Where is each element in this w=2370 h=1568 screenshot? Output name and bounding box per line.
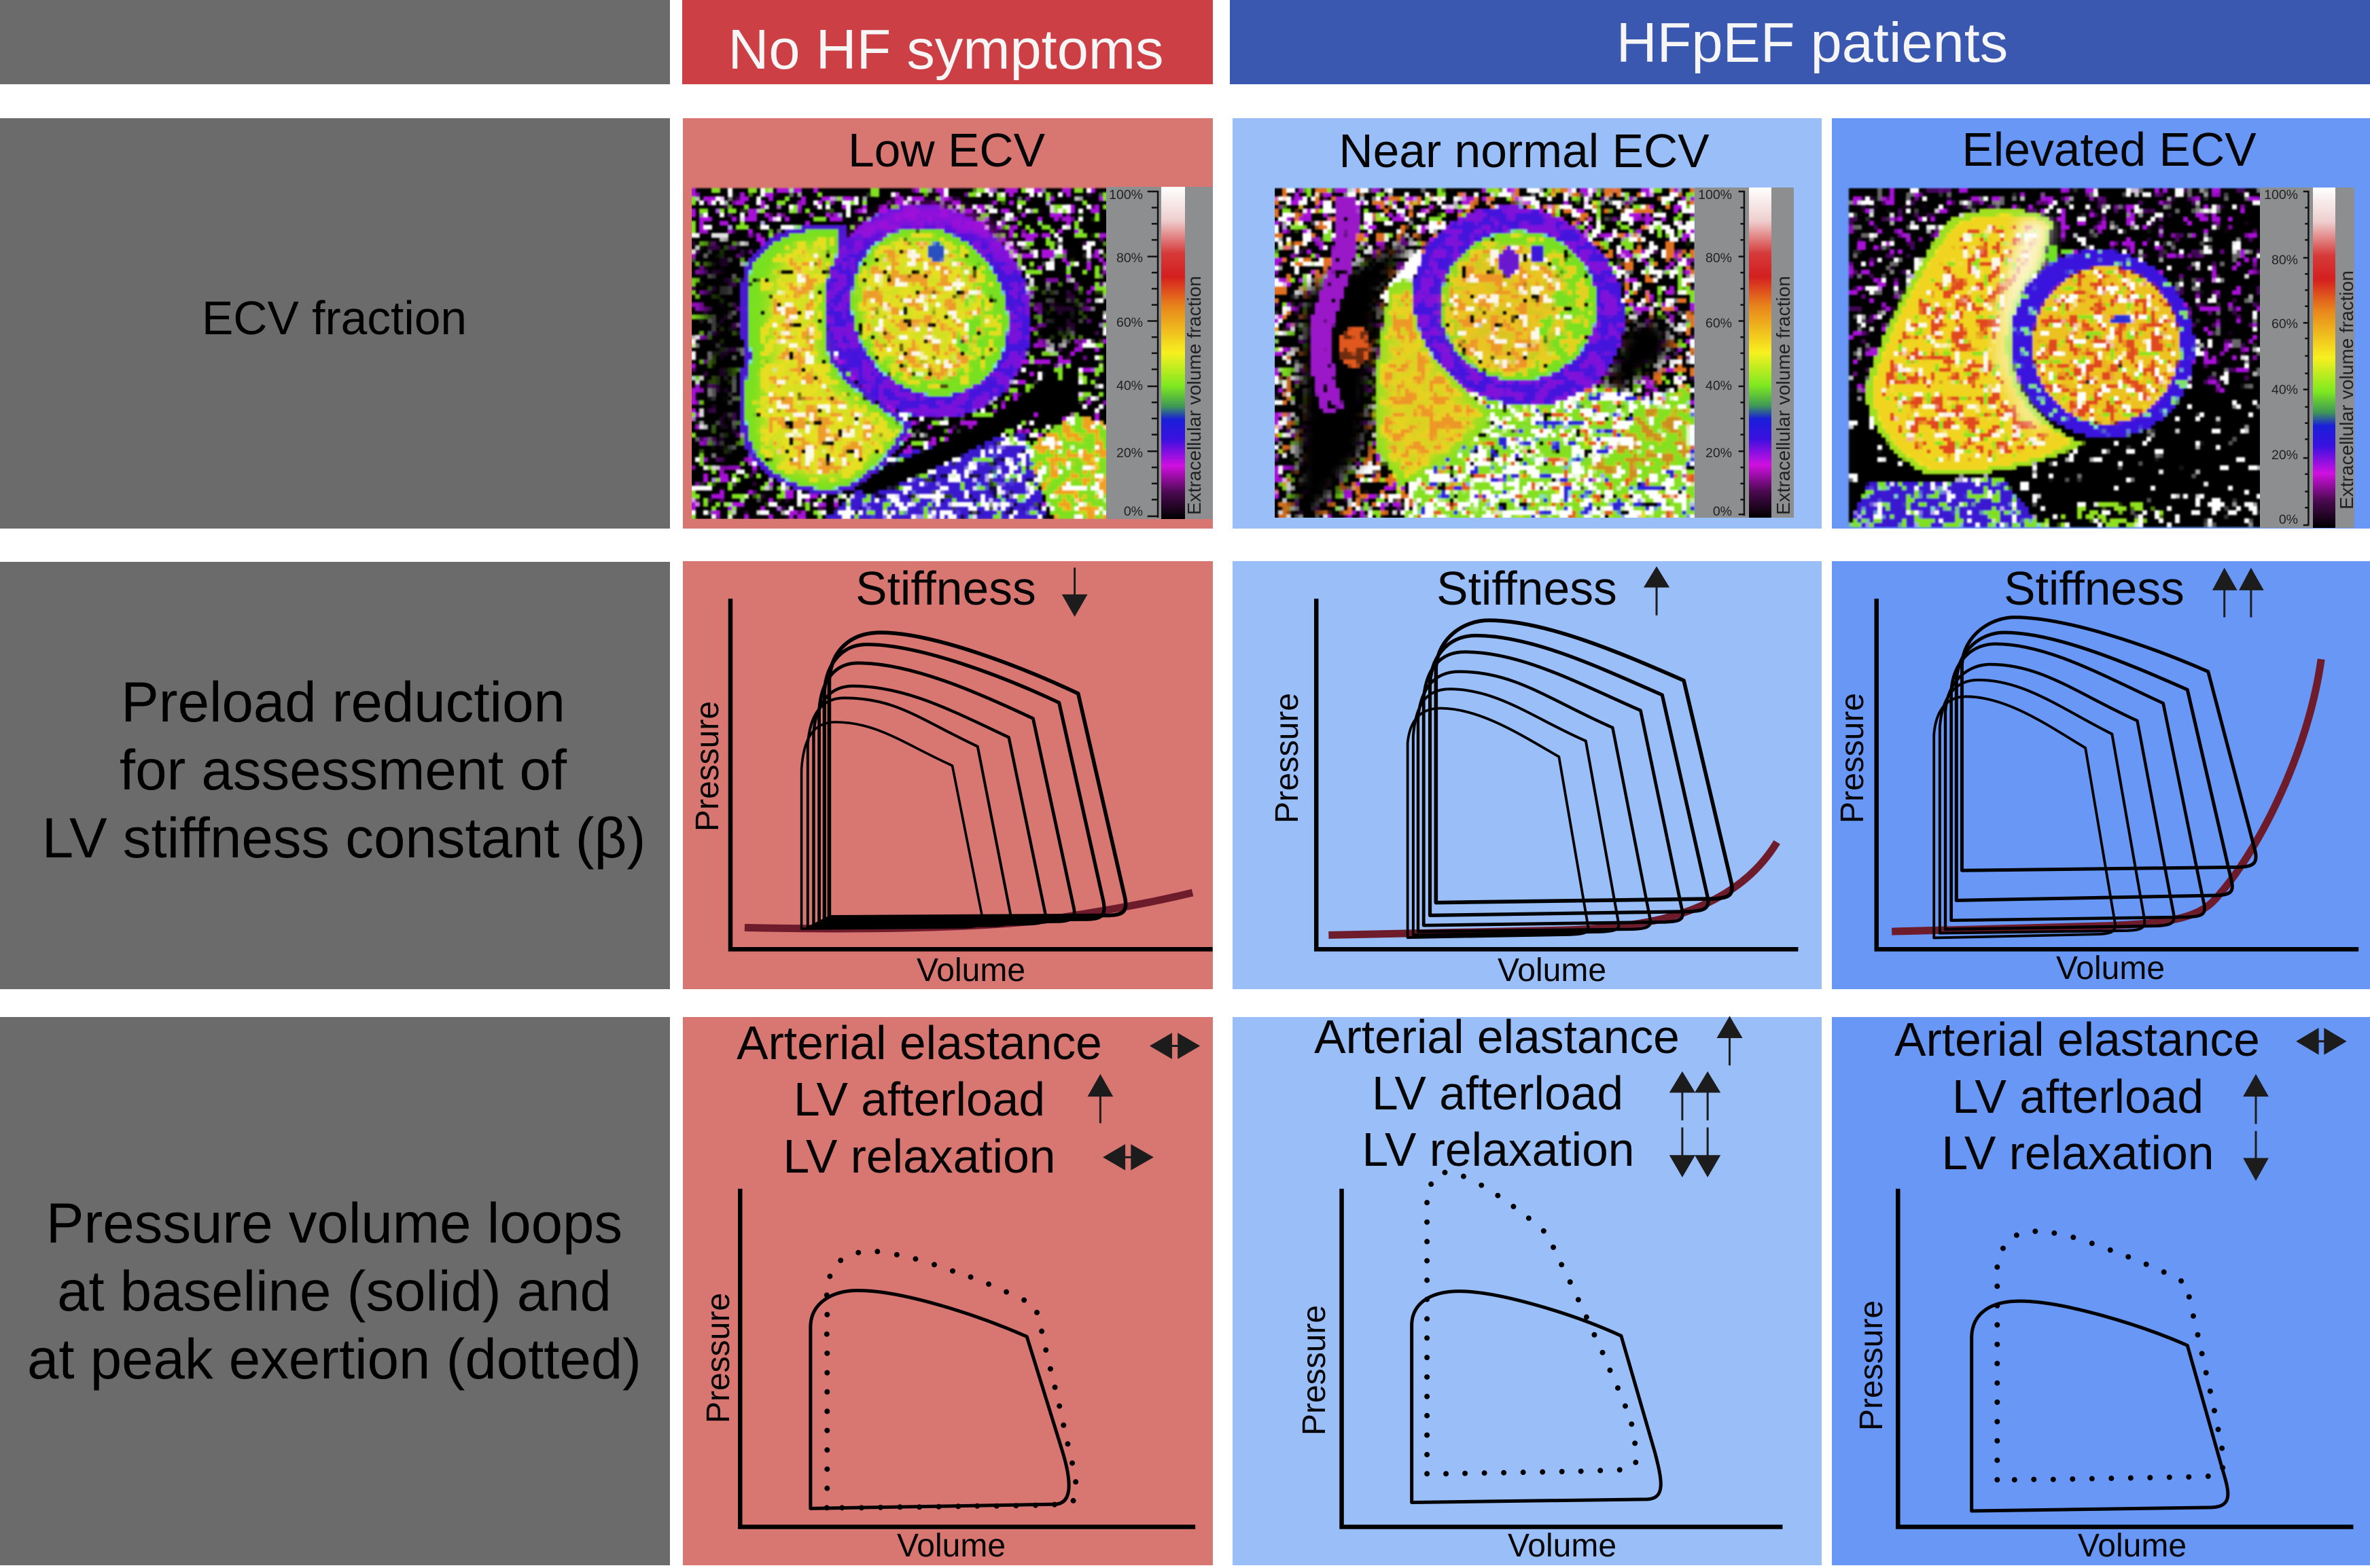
colour scale panel: 80% xyxy=(1116,251,1143,266)
colour scale panel: 0% xyxy=(1124,504,1143,519)
axis labels: Volume xyxy=(897,1528,1006,1564)
title: Low ECV: Low ECV xyxy=(848,124,1046,177)
colour scale panel: 0% xyxy=(1713,504,1732,519)
pressure volume chart with preload reduction loops xyxy=(1316,568,1798,949)
colour scale panel: 40% xyxy=(2271,382,2298,397)
panel: stiffness elevated ECV xyxy=(1832,561,2370,989)
axis labels: Volume xyxy=(1498,952,1606,988)
row label: ECV fraction xyxy=(0,118,670,529)
text: haemodynamic labels: LV afterload xyxy=(1952,1070,2204,1123)
row label: pressure volume loops: Pressure volume loops xyxy=(46,1192,622,1255)
colour scale panel: 60% xyxy=(2271,317,2298,332)
axis labels: Volume xyxy=(2078,1528,2187,1564)
text: haemodynamic labels: Arterial elastance xyxy=(1894,1013,2260,1066)
panel: stiffness near normal ECV xyxy=(1233,561,1822,989)
axis labels: Pressure xyxy=(1269,693,1305,823)
row label: preload reduction: LV stiffness constant (β) xyxy=(42,806,645,870)
colour scale panel: 100% xyxy=(1698,188,1732,202)
row label: pressure volume loops xyxy=(0,1017,670,1565)
colour scale panel: Extracellular volume fraction xyxy=(1184,276,1205,515)
colour scale panel: 20% xyxy=(1705,446,1732,461)
text: haemodynamic labels: LV afterload xyxy=(794,1073,1045,1126)
ECV map image xyxy=(1847,188,2260,528)
axis labels xyxy=(1296,1305,1616,1564)
heading: Stiffness up: Stiffness xyxy=(1436,562,1617,615)
pressure volume loop chart xyxy=(740,1035,1198,1527)
axis labels: Pressure xyxy=(701,1293,737,1423)
axis labels: Pressure xyxy=(1854,1300,1890,1431)
axis labels xyxy=(1269,693,1606,988)
panel: PV loop elevated ECV xyxy=(1832,1013,2370,1565)
colour scale panel: 100% xyxy=(2264,188,2298,202)
arrows: unchanged, up, unchanged xyxy=(1089,1035,1198,1169)
colour scale panel xyxy=(1695,188,1794,519)
text: haemodynamic labels: Arterial elastance xyxy=(737,1016,1102,1069)
colour scale panel: 0% xyxy=(2279,512,2298,527)
heading: HFpEF patients xyxy=(1230,0,2370,84)
title: Near normal ECV: Near normal ECV xyxy=(1339,124,1710,177)
colour scale panel xyxy=(1106,187,1213,519)
pressure volume chart with preload reduction loops xyxy=(1877,570,2358,949)
panel: near normal ECV map xyxy=(1233,118,1822,529)
axis labels xyxy=(1854,1300,2187,1564)
arrows: double up xyxy=(2214,570,2262,618)
text: haemodynamic labels: LV relaxation xyxy=(1362,1123,1635,1176)
text: haemodynamic labels xyxy=(737,1016,1102,1183)
axis labels: Pressure xyxy=(690,701,726,832)
colour scale panel xyxy=(2260,188,2357,528)
heading: Stiffness double up: Stiffness xyxy=(2004,562,2185,615)
colour scale panel: 60% xyxy=(1705,316,1732,331)
pressure volume loop chart xyxy=(1342,1018,1782,1527)
row label: preload reduction: for assessment of xyxy=(120,738,567,802)
arrows: unchanged, up, down xyxy=(2245,1030,2345,1179)
row label: pressure volume loops: at baseline (solid) and xyxy=(57,1260,612,1323)
row label: pressure volume loops: at peak exertion (dotted) xyxy=(27,1328,641,1391)
text: haemodynamic labels xyxy=(1894,1013,2260,1179)
axis labels: Volume xyxy=(1508,1528,1616,1564)
colour scale panel: 80% xyxy=(1705,251,1732,266)
heading: No HF symptoms xyxy=(682,0,1213,84)
pressure volume chart with preload reduction loops xyxy=(730,568,1213,949)
text: haemodynamic labels: Arterial elastance xyxy=(1314,1010,1680,1063)
axis labels: Pressure xyxy=(1296,1305,1332,1436)
panel: stiffness low ECV xyxy=(683,561,1213,989)
text: haemodynamic labels: LV relaxation xyxy=(783,1130,1056,1183)
heading: HFpEF patients: HFpEF patients xyxy=(1616,11,2008,74)
axis labels xyxy=(701,1293,1006,1564)
panel: PV loop low ECV xyxy=(683,1016,1213,1565)
text: haemodynamic labels: LV afterload xyxy=(1372,1067,1623,1120)
colour scale panel: 20% xyxy=(1116,446,1143,461)
ECV map image xyxy=(1275,188,1695,518)
row label: preload reduction xyxy=(0,562,670,989)
colour scale panel: Extracellular volume fraction xyxy=(2336,270,2357,510)
panel: low ECV map xyxy=(683,118,1213,529)
colour scale panel: Extracellular volume fraction xyxy=(1773,276,1794,515)
title: Elevated ECV: Elevated ECV xyxy=(1962,123,2257,176)
ECV map image xyxy=(692,187,1106,519)
axis labels xyxy=(1835,693,2165,986)
axis labels xyxy=(690,701,1025,988)
colour scale panel: 20% xyxy=(2271,448,2298,463)
heading: No HF symptoms: No HF symptoms xyxy=(728,18,1164,81)
panel: elevated ECV map xyxy=(1832,118,2370,529)
background band: top-left header cell xyxy=(0,0,670,84)
arrow: down xyxy=(1063,568,1086,615)
arrow: up xyxy=(1646,568,1667,616)
axis labels: Pressure xyxy=(1835,693,1871,823)
row label: preload reduction: Preload reduction xyxy=(121,671,565,734)
axis labels: Volume xyxy=(917,952,1025,988)
text: haemodynamic labels xyxy=(1314,1010,1680,1176)
arrows: up, double up, double down xyxy=(1671,1018,1741,1175)
axis labels: Volume xyxy=(2056,950,2165,986)
colour scale panel: 60% xyxy=(1116,315,1143,330)
pressure volume loop chart xyxy=(1898,1030,2354,1527)
colour scale panel: 40% xyxy=(1705,378,1732,393)
colour scale panel: 80% xyxy=(2271,253,2298,268)
panel: PV loop near normal ECV xyxy=(1233,1010,1822,1565)
text: haemodynamic labels: LV relaxation xyxy=(1941,1126,2214,1179)
colour scale panel: 40% xyxy=(1116,378,1143,393)
colour scale panel: 100% xyxy=(1109,188,1143,202)
heading: Stiffness down: Stiffness xyxy=(855,562,1036,615)
row label: ECV fraction: ECV fraction xyxy=(202,291,467,344)
